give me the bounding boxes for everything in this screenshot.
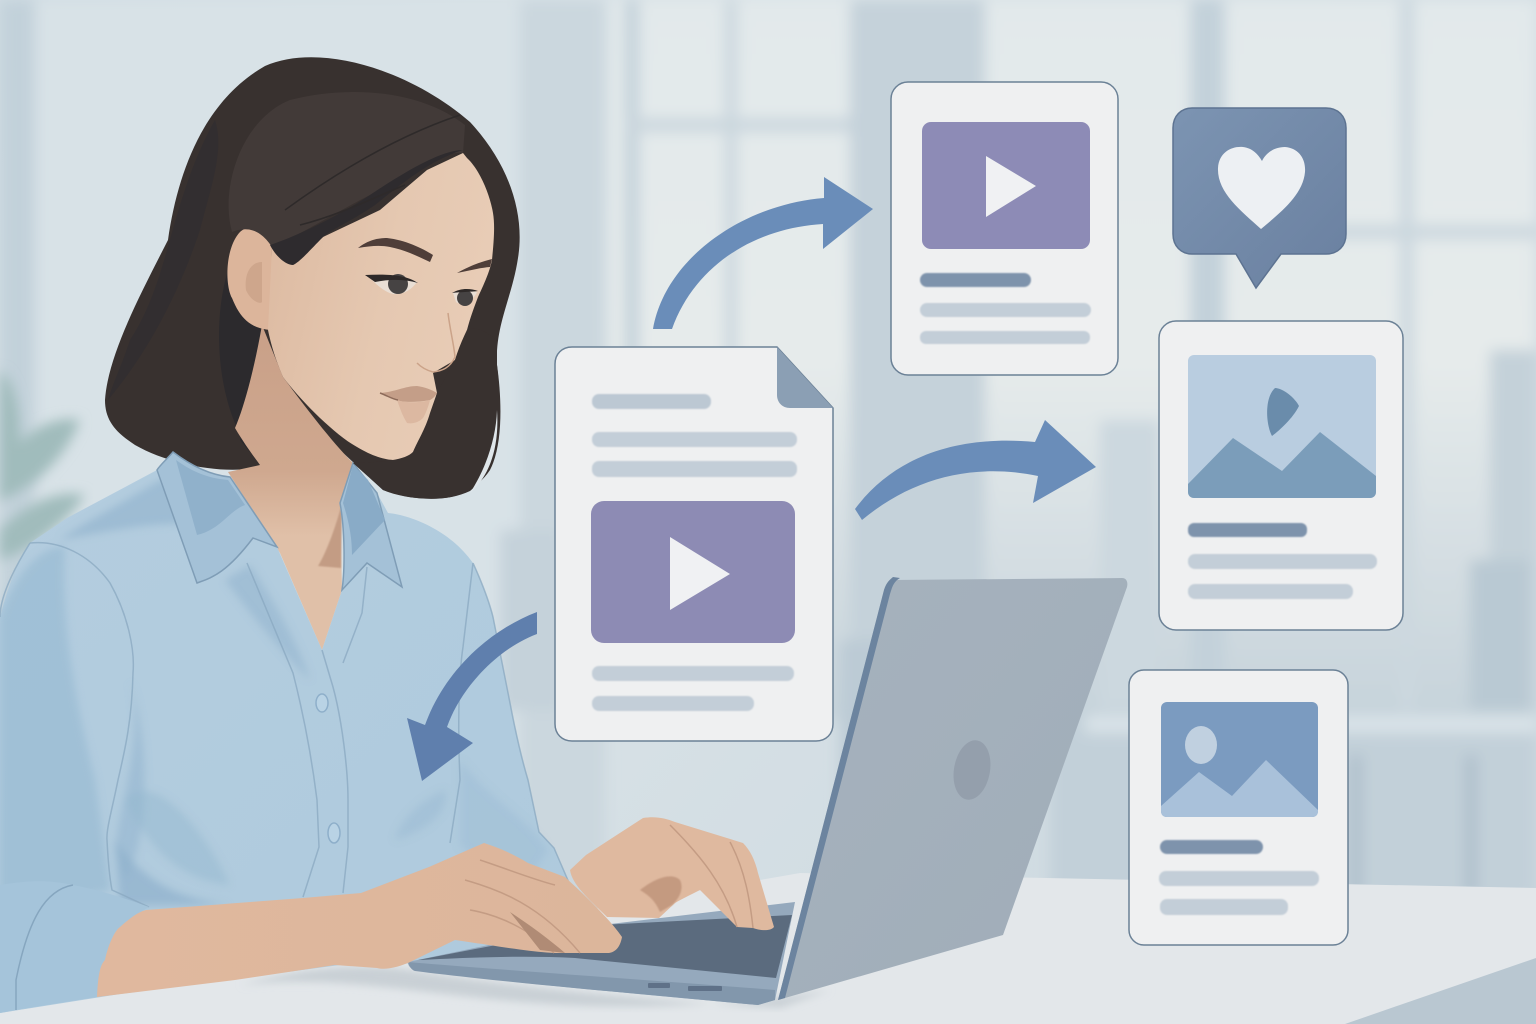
heart (1218, 147, 1305, 229)
eyebrows (358, 238, 433, 262)
video thumbnail (922, 122, 1090, 249)
right hand (570, 817, 774, 930)
page fold (777, 347, 833, 408)
text lines (920, 273, 1091, 344)
keyboard (418, 915, 792, 978)
eyes (372, 276, 417, 294)
image thumbnail (1161, 702, 1318, 817)
laptop (408, 577, 1127, 1005)
left arm and hand (97, 843, 622, 997)
neck fold shadow (318, 503, 342, 568)
text lines (1159, 840, 1319, 915)
image thumbnail (1188, 355, 1376, 498)
buttons (316, 694, 340, 843)
play shape (1267, 388, 1299, 436)
mountains (1188, 432, 1376, 498)
nose (417, 313, 455, 372)
video thumbnail (591, 501, 795, 643)
arrow: to top card (653, 177, 873, 329)
face (268, 153, 494, 460)
card: middle image post (1159, 321, 1403, 630)
card: source document (555, 347, 833, 741)
hair lock gap (470, 410, 497, 493)
hair right lock (353, 329, 500, 499)
laptop base (408, 902, 795, 1005)
screen back (778, 578, 1127, 1000)
card: bottom image post (1129, 670, 1348, 945)
play icon (670, 537, 730, 610)
sleeve seams (0, 543, 580, 907)
arrow: to woman (407, 612, 537, 781)
text lines (592, 394, 797, 711)
ear (227, 228, 272, 330)
card: top video post (891, 82, 1118, 375)
woman (0, 57, 580, 1013)
shirt shading (0, 480, 548, 960)
sun (1185, 726, 1217, 764)
mountains (1161, 760, 1318, 817)
neck (228, 325, 353, 650)
hair back (105, 57, 520, 499)
hands (97, 817, 774, 997)
play icon (986, 156, 1036, 217)
shirt collar (157, 452, 277, 583)
shirt body (0, 470, 580, 1013)
text lines (1188, 523, 1377, 599)
icon: heart speech bubble (1173, 108, 1346, 288)
plant leaves (0, 370, 85, 560)
lips (380, 386, 437, 402)
left cuff (0, 881, 149, 1013)
arrow: to right card (855, 420, 1096, 520)
hair front (229, 92, 465, 247)
laptop logo (949, 737, 995, 803)
desk (0, 873, 1536, 1024)
